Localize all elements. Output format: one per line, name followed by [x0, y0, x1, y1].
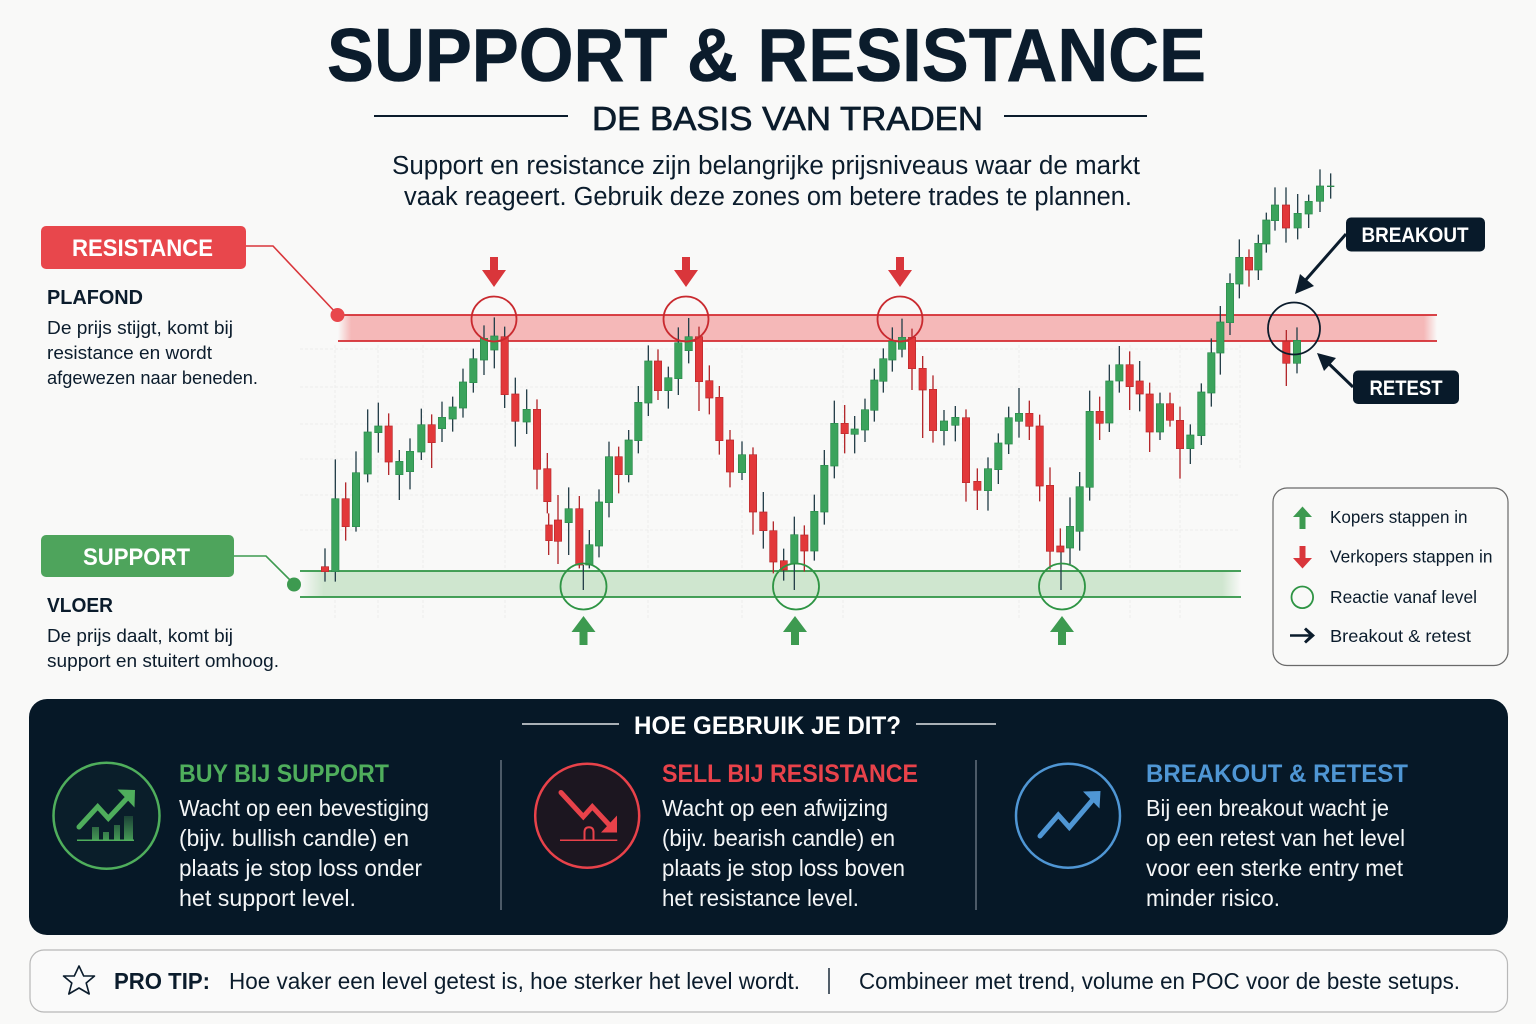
column: buy bij support: (bijv. bullish candle) en: [179, 825, 409, 851]
column: buy bij support: plaats je stop loss onder: [179, 855, 422, 881]
intro text: vaak reageert. Gebruik deze zones om betere trades te plannen.: [404, 183, 1132, 211]
support label with connector: [41, 535, 301, 592]
support label with connector: SUPPORT: [83, 544, 190, 571]
column: sell bij resistance: SELL BIJ RESISTANCE: [662, 760, 918, 788]
panel: plafond explanation: De prijs stijgt, komt bij: [47, 317, 233, 338]
support zone: [300, 571, 1241, 597]
label: retest: RETEST: [1370, 377, 1443, 400]
legend: verkopers: Verkopers stappen in: [1330, 546, 1492, 566]
panel: legend: [1273, 488, 1508, 666]
column: breakout en retest: minder risico.: [1146, 885, 1280, 911]
subtitle: DE BASIS VAN TRADEN: [592, 100, 983, 137]
label: breakout: [1346, 218, 1485, 252]
icon: buy chart: [54, 763, 160, 869]
column: buy bij support: BUY BIJ SUPPORT: [179, 760, 389, 788]
column: buy bij support: het support level.: [179, 885, 356, 911]
arrow: retest: [1317, 353, 1353, 387]
column: breakout en retest: BREAKOUT & RETEST: [1146, 760, 1408, 788]
panel: how to use: [29, 699, 1508, 935]
green up arrows: [572, 616, 1074, 645]
panel: plafond explanation: resistance en wordt: [47, 342, 212, 363]
panel: vloer explanation: [47, 595, 279, 671]
column: breakout en retest: Bij een breakout wacht je: [1146, 795, 1389, 821]
legend: breakout en retest: Breakout & retest: [1330, 626, 1471, 646]
column: sell bij resistance: plaats je stop loss boven: [662, 855, 905, 881]
column: buy bij support: [179, 760, 429, 911]
column: sell bij resistance: [662, 760, 918, 911]
pro tip sentence one: Hoe vaker een level getest is, hoe sterker het level wordt.: [229, 968, 800, 994]
panel heading: HOE GEBRUIK JE DIT?: [634, 712, 901, 740]
label: breakout: BREAKOUT: [1362, 224, 1469, 247]
candlestick chart: [321, 169, 1334, 590]
column: sell bij resistance: Wacht op een afwijzing: [662, 795, 888, 821]
resistance label with connector: [41, 226, 344, 322]
panel: vloer explanation: De prijs daalt, komt bij: [47, 625, 233, 646]
reaction circles at support: [560, 564, 1085, 610]
legend: reactie: Reactie vanaf level: [1330, 587, 1477, 607]
panel: plafond explanation: PLAFOND: [47, 287, 143, 309]
resistance zone: [338, 315, 1437, 341]
label: retest: [1353, 370, 1459, 404]
panel: plafond explanation: afgewezen naar beneden.: [47, 367, 258, 388]
breakout retest circle: [1268, 302, 1320, 354]
panel: plafond explanation: [47, 287, 258, 388]
arrow: breakout: [1295, 234, 1346, 294]
reaction circles at resistance: [472, 296, 922, 342]
column: breakout en retest: voor een sterke entry met: [1146, 855, 1404, 881]
intro text: [392, 152, 1140, 211]
column: buy bij support: Wacht op een bevestiging: [179, 795, 429, 821]
pro tip sentence two: Combineer met trend, volume en POC voor de beste setups.: [859, 968, 1460, 994]
column: sell bij resistance: het resistance level.: [662, 885, 859, 911]
column: breakout en retest: [1146, 760, 1408, 911]
panel: vloer explanation: support en stuitert omhoog.: [47, 650, 279, 671]
icon: star: [64, 966, 94, 994]
legend: kopers: Kopers stappen in: [1330, 507, 1468, 527]
column: sell bij resistance: (bijv. bearish candle) en: [662, 825, 895, 851]
pro tip label: PRO TIP:: [114, 968, 210, 994]
title: SUPPORT & RESISTANCE: [327, 13, 1206, 97]
legend: kopers: [1293, 506, 1468, 529]
column: breakout en retest: op een retest van het level: [1146, 825, 1405, 851]
panel: vloer explanation: VLOER: [47, 595, 114, 617]
red down arrows: [482, 257, 912, 287]
resistance label with connector: RESISTANCE: [72, 235, 213, 262]
panel: pro tip: [30, 950, 1508, 1012]
intro text: Support en resistance zijn belangrijke prijsniveaus waar de markt: [392, 152, 1140, 180]
icon: sell chart: [535, 764, 639, 868]
icon: breakout chart: [1016, 764, 1120, 868]
